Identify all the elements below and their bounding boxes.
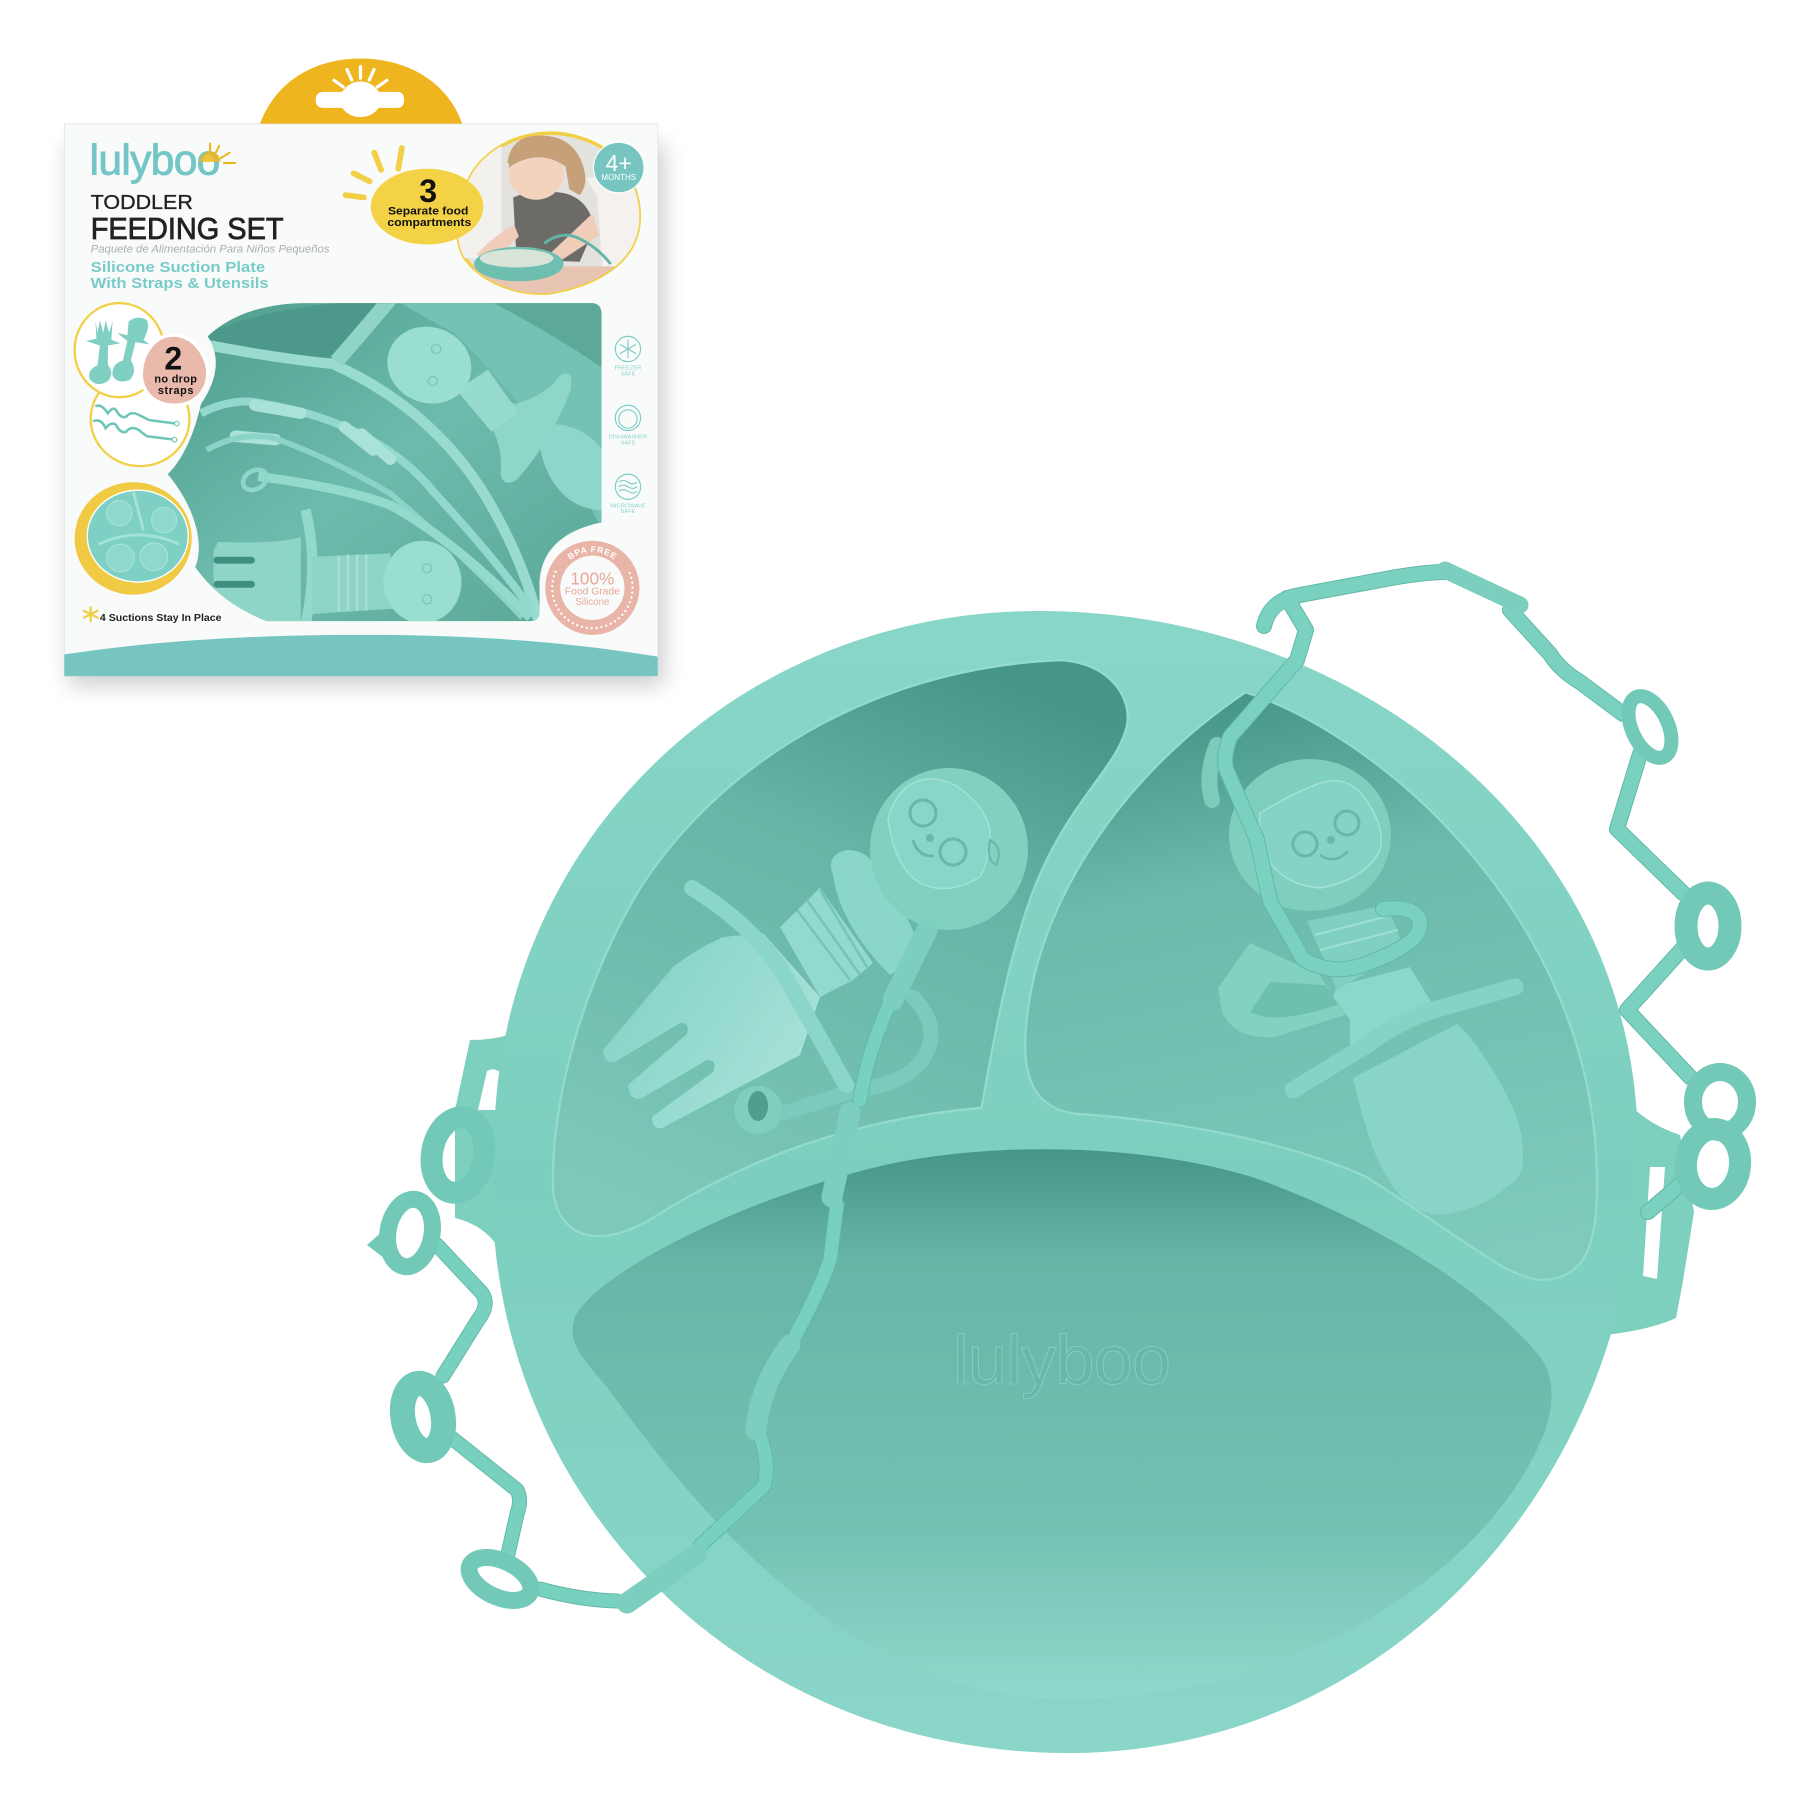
product description <box>91 259 269 292</box>
plate with straps and utensils <box>367 570 1747 1753</box>
callout: 3 compartments: compartments <box>387 217 471 229</box>
strap shadow <box>437 1003 890 1601</box>
BPA free badge: Silicone <box>575 597 609 608</box>
suction caption: 4 Suctions Stay In Place <box>100 613 222 624</box>
age badge: 4+ <box>606 150 632 176</box>
suction caption <box>84 607 222 624</box>
plate ears <box>455 1022 1694 1335</box>
fork head <box>603 933 820 1128</box>
spoon cuff loop <box>1218 943 1345 1037</box>
product description: With Straps & Utensils <box>91 275 269 292</box>
hanger tab <box>259 59 463 125</box>
title: FEEDING SET <box>91 211 284 246</box>
spoon handle <box>1307 905 1405 990</box>
icon: microwave safe: MICROWAVE <box>610 503 646 509</box>
icon: freezer safe: SAFE <box>620 371 636 377</box>
package shadow <box>69 144 664 685</box>
icon: microwave safe: SAFE <box>620 509 636 515</box>
fork <box>603 768 1028 1134</box>
plate body <box>492 611 1638 1753</box>
Spanish subtitle: Paquete de Alimentación Para Niños Pequeños <box>91 244 330 256</box>
callout: 2 no drop straps <box>141 335 208 405</box>
callout: 3 compartments <box>346 148 483 245</box>
well: right <box>1025 692 1597 1280</box>
left strap <box>437 930 927 1603</box>
plate divider <box>204 344 540 626</box>
fork strap loop <box>734 997 931 1134</box>
strap body <box>437 1003 890 1601</box>
fork bear head <box>870 768 1028 930</box>
product description: Silicone Suction Plate <box>91 259 265 276</box>
icon: dishwasher safe: SAFE <box>620 440 636 446</box>
straps in window <box>201 402 532 610</box>
strap top tab <box>1445 570 1520 605</box>
strap shadow <box>1225 572 1690 1212</box>
BPA free badge: BPA FREE <box>567 546 617 560</box>
ear slots <box>478 1069 1665 1279</box>
mini fork <box>86 320 121 384</box>
title <box>91 191 284 246</box>
icon: dishwasher safe <box>609 405 647 446</box>
icon: freezer safe: FREEZER <box>615 366 641 372</box>
package card <box>64 124 658 676</box>
strap end tip <box>367 1230 384 1258</box>
fork collar <box>831 850 915 975</box>
suction underside circle <box>75 482 192 595</box>
BPA free badge: 100% <box>570 568 614 588</box>
right strap <box>1209 570 1690 1212</box>
well: top left <box>553 660 1128 1236</box>
BPA free badge <box>545 540 640 635</box>
straps circle <box>91 372 189 466</box>
callout: 2 no drop straps: 2 <box>164 341 182 377</box>
icon: freezer safe <box>615 336 641 377</box>
strap tabs <box>627 930 927 1603</box>
teal base band <box>64 635 658 676</box>
logo: lulyboo <box>90 136 220 183</box>
callout: 3 compartments: 3 <box>419 173 437 209</box>
callout: 3 compartments: Separate food <box>388 206 468 218</box>
fork guard <box>692 888 846 1085</box>
strap body <box>1225 572 1690 1212</box>
package <box>58 58 674 696</box>
spoon <box>1218 759 1523 1215</box>
title: TODDLER <box>91 191 193 214</box>
side ribbon <box>1209 745 1217 800</box>
icon: dishwasher safe: DISHWASHER <box>609 435 647 441</box>
embossed logo: lulyboo <box>953 1321 1171 1399</box>
spoon neck <box>1333 967 1433 1051</box>
callout: 2 no drop straps: straps <box>158 385 193 397</box>
well: bottom <box>573 1149 1552 1699</box>
safety icons <box>609 336 647 515</box>
strap rings <box>382 689 1747 1609</box>
toddler photo <box>456 131 642 295</box>
package window with product <box>168 298 608 626</box>
utensils circle <box>75 303 164 397</box>
fork handle <box>780 888 873 997</box>
callout: 2 no drop straps: no drop <box>154 373 197 385</box>
age badge: MONTHS <box>601 173 636 182</box>
mini spoon <box>112 318 149 382</box>
age badge <box>594 142 644 193</box>
icon: microwave safe <box>610 474 646 515</box>
spoon head <box>1353 1024 1523 1215</box>
spoon guard <box>1293 987 1515 1090</box>
fork in window <box>214 537 301 626</box>
spoon in window <box>540 424 602 510</box>
BPA free badge: Food Grade <box>565 587 620 598</box>
spoon bear head <box>1229 759 1391 911</box>
